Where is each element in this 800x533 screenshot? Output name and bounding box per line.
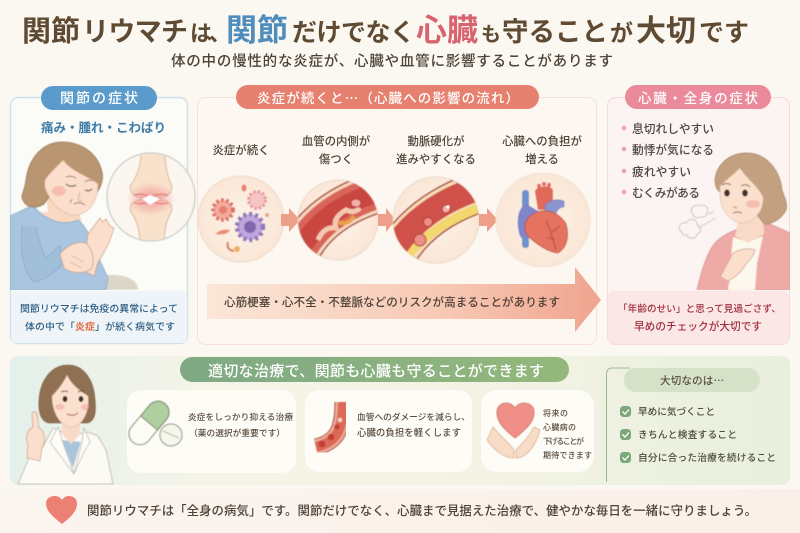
card: blood vessel: 血管へのダメージを減らし、 xyxy=(357,411,470,422)
joint panel caption: 関節リウマチは免疫の異常によって xyxy=(20,302,178,315)
card: blood vessel: 心臓の負担を軽くします xyxy=(357,427,461,438)
symptom list: 疲れやすい xyxy=(632,165,691,179)
title: 大切 xyxy=(636,15,696,48)
card: future prevention xyxy=(481,390,594,472)
icon: vessel xyxy=(316,402,343,448)
title: 守ること xyxy=(502,17,608,47)
panel: heart and body symptoms xyxy=(608,85,790,344)
symptom panel caption xyxy=(608,291,789,344)
title: です xyxy=(699,19,749,47)
joint panel heading xyxy=(41,86,157,110)
title: 関節 xyxy=(226,13,288,48)
icon: heart in hands xyxy=(487,403,540,458)
step labels xyxy=(213,134,582,166)
card: future prevention: 期待できます xyxy=(543,450,592,460)
step labels: 心臓への負担が xyxy=(502,134,582,148)
joint panel caption: 体の中で「炎症」が続く病気です xyxy=(25,320,175,333)
step labels: 傷つく xyxy=(319,152,353,166)
icon: heart xyxy=(496,173,590,267)
step labels: 増える xyxy=(525,152,559,166)
arrow xyxy=(281,208,300,232)
card: future prevention: 将来の xyxy=(543,408,568,418)
joint panel caption xyxy=(11,291,187,343)
card: medicine: （薬の選択が重要です） xyxy=(189,427,285,438)
symptom list xyxy=(622,122,714,200)
symptom list: 息切れしやすい xyxy=(632,122,714,136)
symptom panel heading: 心臓・全身の症状 xyxy=(638,91,758,106)
card: future prevention: 心臓病の xyxy=(543,422,576,432)
card: blood vessel xyxy=(305,390,472,472)
footer banner xyxy=(0,489,800,533)
symptom panel heading xyxy=(625,85,771,109)
joint panel heading: 関節の症状 xyxy=(60,90,138,106)
risk arrow xyxy=(207,267,601,332)
icon: arteriosclerosis xyxy=(392,177,490,264)
icon: woman with sore hands xyxy=(10,142,138,290)
icon: breath puffs xyxy=(679,205,716,238)
title: は xyxy=(190,21,212,46)
treatment heading: 適切な治療で、関節も心臓も守ることができます xyxy=(208,362,544,380)
risk arrow: 心筋梗塞・心不全・不整脈などのリスクが高まることがあります xyxy=(224,295,560,309)
icon: damaged vessel xyxy=(298,180,385,260)
title: 関節 xyxy=(22,15,80,48)
panel: joint symptoms xyxy=(10,86,195,344)
card: future prevention: 下げることが xyxy=(543,436,584,446)
step labels: 血管の内側が xyxy=(302,134,371,148)
step labels: 動脈硬化が xyxy=(408,134,465,148)
panel: heart impact flow xyxy=(198,85,601,344)
checklist: 早めに気づくこと xyxy=(638,405,715,418)
title xyxy=(22,13,749,48)
checklist xyxy=(620,405,776,464)
title: も xyxy=(481,24,501,46)
icon: capsule and tablet xyxy=(125,397,182,449)
symptom panel caption: 「年齢のせい」と思って見過ごさず、 xyxy=(618,303,781,315)
icon: heart xyxy=(46,496,77,524)
flow heading: 炎症が続くと…（心臓への影響の流れ） xyxy=(257,87,519,107)
card: medicine: 炎症をしっかり抑える治療 xyxy=(188,411,293,422)
checklist: 自分に合った治療を続けること xyxy=(638,451,776,464)
key points heading: 大切なのは… xyxy=(660,373,724,388)
symptom list: むくみがある xyxy=(632,186,700,200)
card: medicine xyxy=(125,390,296,473)
title: が xyxy=(610,20,633,46)
icon: inflammatory cells xyxy=(198,176,284,262)
arrow xyxy=(479,208,498,232)
joint symptoms subheading: 痛み・腫れ・こわばり xyxy=(41,120,166,135)
icon: inflamed joint xyxy=(107,150,195,245)
symptom panel caption: 早めのチェックが大切です xyxy=(634,320,762,333)
panel: treatment xyxy=(10,356,790,485)
title: リウマチ xyxy=(82,17,188,47)
key points heading xyxy=(624,368,760,392)
icon: doctor xyxy=(18,365,113,484)
title: 、 xyxy=(209,21,231,46)
icon: woman holding chest xyxy=(697,153,790,290)
subtitle: 体の中の慢性的な炎症が、心臓や血管に影響することがあります xyxy=(171,52,613,70)
arrow xyxy=(378,208,396,232)
checklist: きちんと検査すること xyxy=(638,428,737,441)
symptom list: 動悸が気になる xyxy=(632,143,714,157)
step labels: 進みやすくなる xyxy=(396,153,476,166)
title: 心臓 xyxy=(416,13,478,48)
treatment heading xyxy=(180,357,569,382)
footer message: 関節リウマチは「全身の病気」です。関節だけでなく、心臓まで見据えた治療で、健やかな毎日を一緒に守りましょう。 xyxy=(87,503,757,518)
title: だけでなく xyxy=(292,19,415,47)
step labels: 炎症が続く xyxy=(213,143,269,157)
panel: key points xyxy=(606,368,776,482)
